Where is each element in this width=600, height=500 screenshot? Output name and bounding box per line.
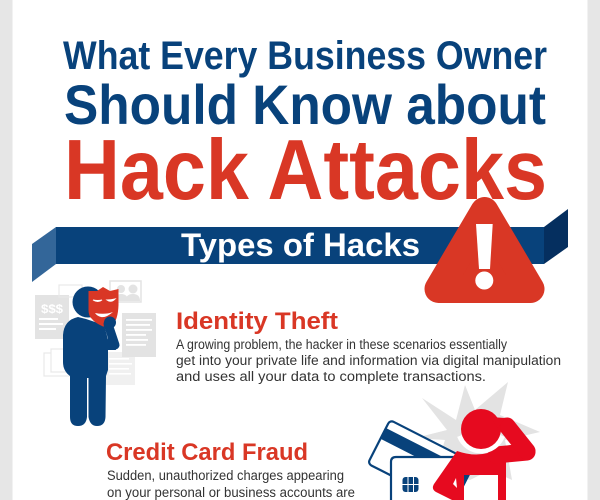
heading: identity theft: Identity Theft [176, 308, 338, 335]
title: What Every Business Owner [63, 34, 547, 78]
title: Hack Attacks [64, 123, 547, 218]
icon: credit cards [368, 420, 475, 500]
person [63, 286, 108, 426]
title [63, 34, 547, 218]
text: credit card fraud description: Sudden, unauthorized charges appearing [107, 468, 344, 483]
document: money [35, 295, 69, 339]
text: identity theft description [176, 337, 561, 384]
text: credit card fraud description: on your personal or business accounts are [107, 485, 355, 500]
arm and hand [110, 324, 116, 346]
heading: credit card fraud: Credit Card Fraud [106, 439, 308, 466]
text: credit card fraud description [107, 468, 355, 500]
title: Should Know about [64, 73, 546, 136]
mask [88, 287, 118, 326]
text: identity theft description: A growing problem, the hacker in these scenarios essentially [176, 337, 507, 352]
banner: types of hacks: Types of Hacks [181, 227, 420, 263]
text: identity theft description: get into your private life and information via digital manipulation [176, 353, 561, 368]
text: identity theft description: and uses all your data to complete transactions. [176, 369, 486, 384]
icon: warning triangle [438, 211, 530, 290]
icon: burst behind figure [415, 382, 540, 480]
icon: frustrated figure [433, 409, 527, 500]
icon: identity theft figure with mask [35, 281, 156, 426]
document: money: $$$ [41, 302, 63, 316]
banner: types of hacks [32, 209, 568, 282]
